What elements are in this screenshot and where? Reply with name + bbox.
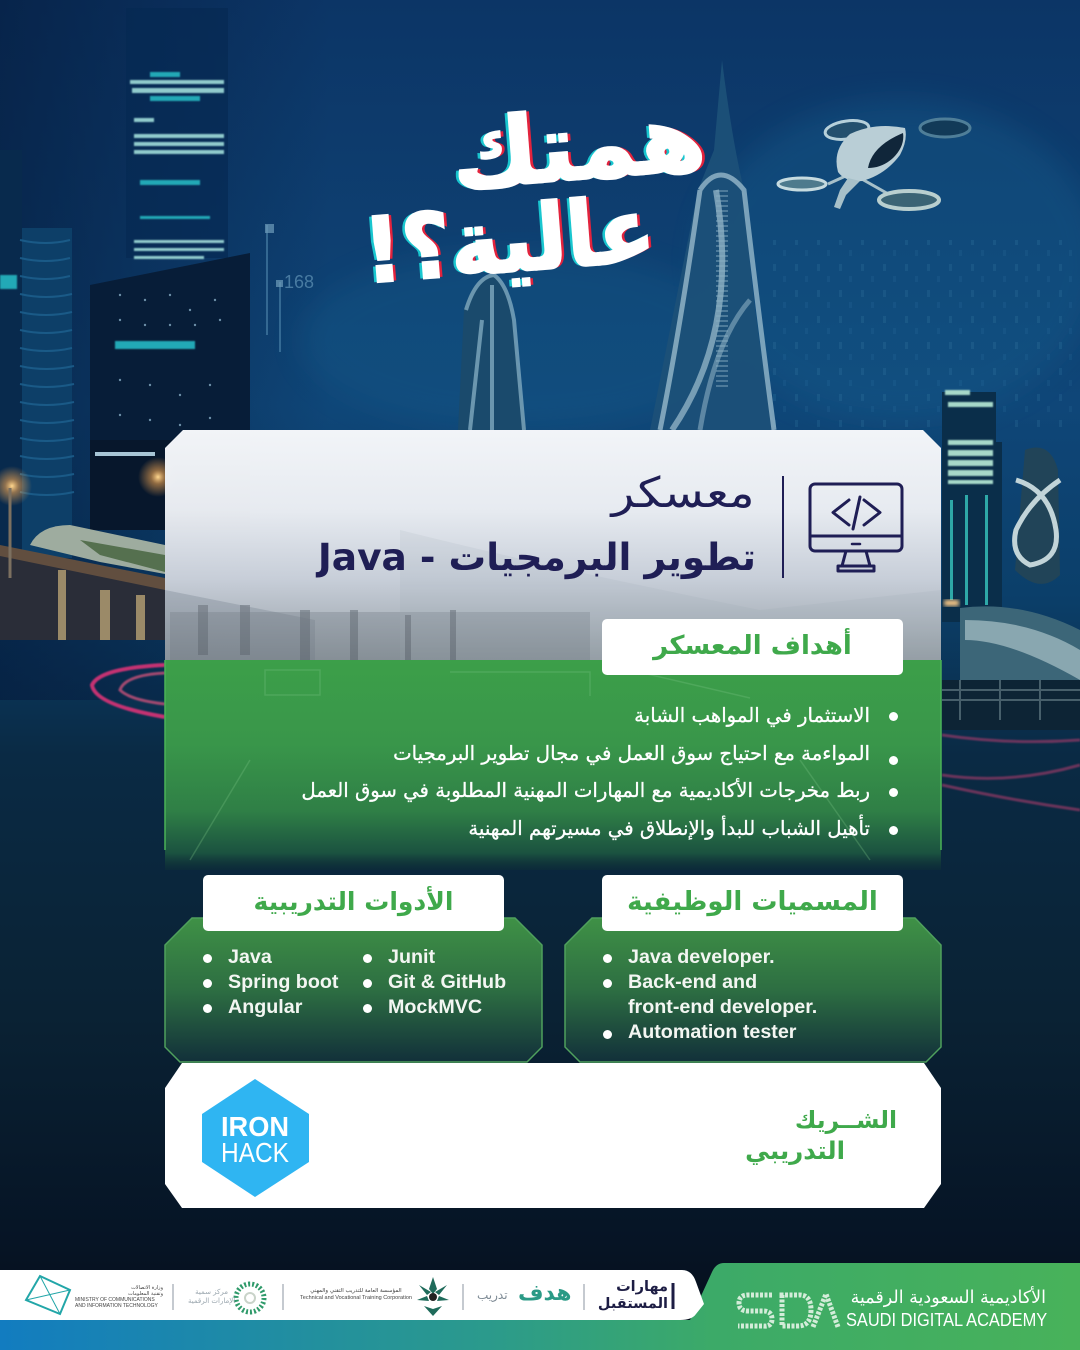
objective 1: الاستثمار في المواهب الشابة [634,704,870,727]
SDA english name: SAUDI DIGITAL ACADEMY [846,1310,1047,1330]
panel: training partner [165,1063,941,1208]
tool names column 2: Junit [388,946,435,968]
tool names column 1: Spring boot [228,971,338,993]
panel: training tools backing [165,918,542,1062]
job names: Automation tester [628,1021,796,1043]
icon: SDA logo [738,1294,838,1327]
list: objectives [301,704,898,840]
icon: iron hack logo: IRON [221,1111,289,1142]
footer partner: hadaf: هدف [518,1281,572,1306]
SDA arabic name: الأكاديمية السعودية الرقمية [851,1288,1046,1308]
heading: training tools [203,875,504,931]
tool names column 2: Git & GitHub [388,971,506,993]
job names: Java developer. [628,946,775,968]
title line 1: همتك [447,83,709,212]
heading: camp objectives [602,619,903,675]
footer: white partner strip [0,1270,704,1320]
bullet 1 [889,712,898,721]
divider [782,476,784,578]
panel: job titles backing [565,918,941,1062]
objective 2: المواءمة مع احتياج سوق العمل في مجال تطوير البرمجيات [393,742,870,765]
train, bridge, lights [0,457,178,717]
heading: job titles [602,875,903,931]
twisted towers [458,60,775,430]
job bullets [603,954,612,1039]
icon: iron hack logo [202,1079,309,1197]
heading: training tools: الأدوات التدريبية [254,887,453,916]
footer partner: TVTC [300,1288,412,1301]
list: training tools [203,946,506,1018]
footer partner marks [26,1276,673,1316]
footer partner: future skills: المستقبل [598,1296,668,1312]
bullet 3 [889,788,898,797]
heading: training partner line 2: التدريبي [745,1136,845,1165]
heading: camp label: معسكر [612,468,755,517]
footer partner: TVTC: Technical and Vocational Training Corporation [300,1295,412,1301]
footer: SDA name [846,1286,1047,1330]
footer: SDA green block [690,1263,1080,1350]
title line 2: عالية؟! [360,177,659,305]
footer partner: ministry: AND INFORMATION TECHNOLOGY [75,1303,158,1309]
job names: front-end developer. [628,996,817,1018]
title [360,83,709,305]
bullet 2 [889,756,898,765]
left buildings [0,8,283,558]
footer partner: future skills: مهارات [616,1279,668,1295]
icon: code monitor [810,484,902,571]
icon: iron hack logo: HACK [221,1137,289,1168]
heading: training partner: الشــريك [795,1106,897,1134]
footer partner: digital government [188,1288,235,1305]
footer partner: TVTC: المؤسسة العامة للتدريب التقني والمهني [310,1288,402,1294]
tool names column 1: Angular [228,996,302,1018]
tool names column 2 [388,946,506,1018]
heading: camp objectives: أهداف المعسكر [653,631,852,661]
footer partner: ministry [75,1285,163,1309]
tool names column 1 [228,946,338,1018]
tools bullets [203,954,372,1013]
card glass upper panel [165,430,941,660]
flying taxi drone [778,118,970,209]
job names [628,946,817,1043]
bullet 4 [889,826,898,835]
decorative number 168: 168 [284,272,314,292]
card green section [165,660,941,870]
footer partner: digital government: مركز سمية [195,1288,228,1296]
footer gradient [0,1320,1080,1350]
list: job titles [603,946,817,1043]
footer partner: tadreeb: تدريب [477,1288,508,1302]
tool names column 2: MockMVC [388,996,482,1018]
footer partner: ministry: MINISTRY OF COMMUNICATIONS [75,1297,155,1303]
right side towers [942,390,1080,810]
footer partner: ministry: وتقنية المعلومات [128,1291,163,1297]
job names: Back-end and [628,971,757,993]
objective 3: ربط مخرجات الأكاديمية مع المهارات المهنية المطلوبة في سوق العمل [301,779,870,802]
tool names column 1: Java [228,946,272,968]
heading: software development Java: تطوير البرمجيات - Java [318,535,756,579]
footer partner: ministry: وزارة الاتصالات [131,1285,163,1291]
footer partner: future skills [598,1279,668,1312]
footer partner: digital government: الإمارات الرقمية [188,1297,235,1305]
heading: job titles: المسميات الوظيفية [627,887,878,917]
objective 4: تأهيل الشباب للبدأ والإنطلاق في مسيرتهم المهنية [468,817,870,840]
